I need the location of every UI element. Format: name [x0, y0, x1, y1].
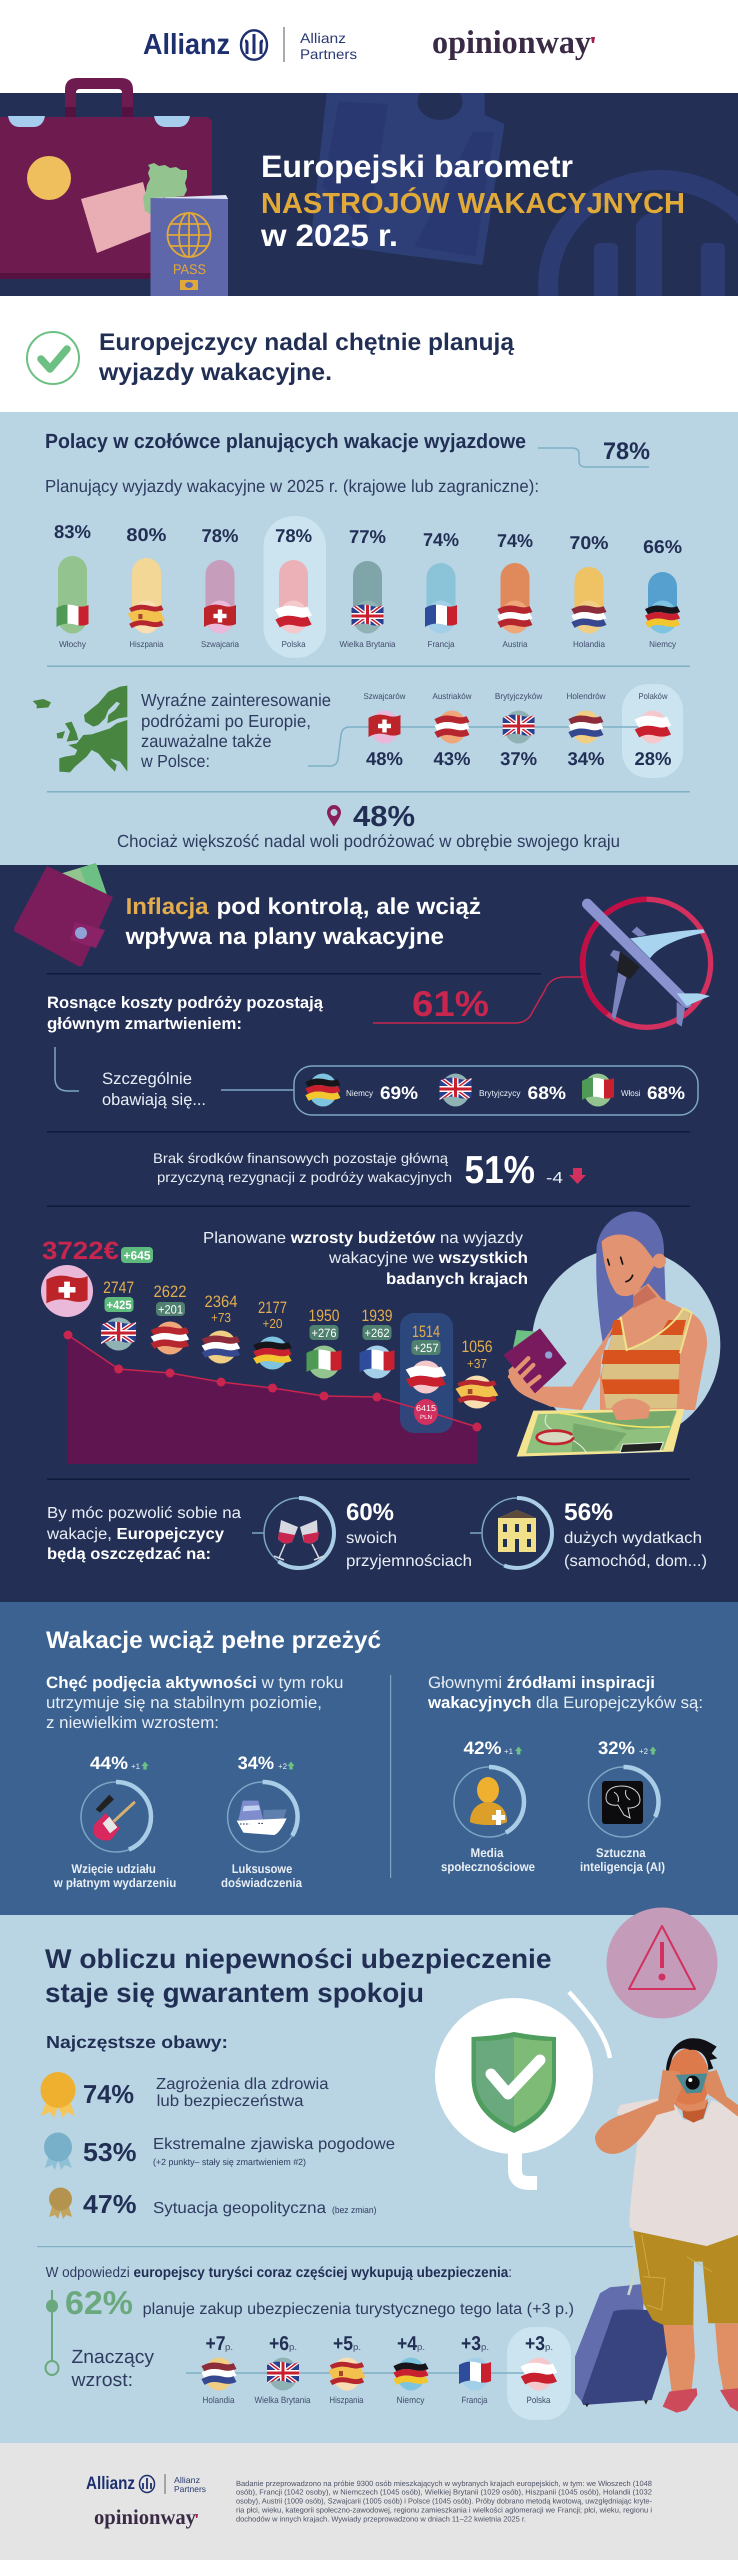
bar: Francja 74%: 74% [423, 529, 459, 550]
bar: Niemcy 66%: 66% [643, 536, 682, 557]
timeline marker [46, 2290, 58, 2375]
illustration: woman with wallet and map [503, 1212, 720, 1457]
bar: Wielka Brytania 77%: Wielka Brytania [340, 639, 396, 649]
heading: inflation: Inflacja [126, 893, 209, 919]
item: Hiszpania +5: +5 [333, 2333, 353, 2355]
item: 47% geopolitical situation [49, 2188, 376, 2219]
bar: Włochy 83% [54, 521, 91, 649]
bar: Szwajcaria 78%: 78% [202, 525, 238, 546]
logo: Allianz [143, 27, 357, 62]
stat: 42% social media: +1 [504, 1747, 514, 1756]
item: Polska 1514: +257 [414, 1341, 439, 1355]
item: Szwajcaria 3722 €: +645 [124, 1248, 151, 1262]
item: Polska +3: p. [545, 2342, 553, 2352]
bar: Wielka Brytania 77% [340, 526, 396, 649]
item: Wielka Brytania +6 [254, 2333, 310, 2405]
text: methodology note [236, 2479, 652, 2524]
heading with 78% callout: 78% [603, 438, 650, 465]
stat: 44% paid event: +1 [131, 1762, 141, 1771]
chart: planned holiday budgets [41, 1237, 495, 1464]
stat: 34% luxury: 34% [238, 1753, 274, 1773]
title: w 2025 r. [260, 218, 398, 253]
stat: 56% big expenses: dużych wydatkach [564, 1530, 702, 1547]
item: Hiszpania +5: p. [353, 2342, 361, 2352]
item: 74% health threats [40, 2072, 329, 2118]
logo: Allianz Partners [86, 2473, 206, 2494]
stat: 62% plan to buy insurance: 62% [65, 2284, 133, 2321]
logo: opinionway: opinionway [94, 2505, 196, 2529]
item: Polaków 28%: Polaków [638, 691, 668, 701]
panel: footer [0, 2443, 738, 2560]
stat: 32% artificial intelligence: inteligencja (AI) [580, 1860, 665, 1874]
stat: 34% luxury: Luksusowe [232, 1862, 292, 1876]
item: Wielka Brytania 2747: 2747 [103, 1279, 134, 1297]
bar: Austria 74%: 74% [497, 530, 533, 551]
chart: pill bars by country [54, 521, 682, 649]
bar: Austria 74%: Austria [502, 639, 528, 649]
item: Francja 1939: 1939 [362, 1307, 392, 1325]
bar: Hiszpania 80%: Hiszpania [129, 639, 164, 649]
text: activities: Chęć podjęcia aktywności w tym roku [46, 1674, 344, 1692]
heading: inflation: wpływa na plany wakacyjne [125, 923, 444, 949]
heading: inflation [125, 893, 481, 949]
logo: Allianz Partners: Partners [174, 2484, 206, 2494]
stat: 51% lack of funds: 51% [464, 1149, 535, 1192]
item: Szwajcaria 3722 €: 3722€ [42, 1237, 119, 1265]
stat: 60% pleasures [252, 1498, 472, 1570]
item: Polaków 28% [634, 691, 672, 769]
item: Wielka Brytania +6: +6 [269, 2333, 289, 2355]
item: 47% geopolitical situation: (bez zmian) [332, 2205, 376, 2215]
item: Szwajcarów 48%: Szwajcarów [364, 691, 406, 701]
text: particularly worried: Szczególnie [102, 1070, 192, 1088]
item: 53% extreme weather: Ekstremalne zjawiska pogodowe [153, 2136, 395, 2153]
item: Francja +3: Francja [462, 2395, 488, 2405]
icon: wine glasses [274, 1520, 324, 1560]
icon: person with plus [470, 1777, 507, 1825]
item: Hiszpania 1056: 1056 [462, 1338, 492, 1356]
item: Austriaków 43%: 43% [434, 748, 470, 769]
header logos [0, 0, 738, 93]
text: significant increase: Znaczący [72, 2347, 155, 2368]
text: methodology note: Badanie przeprowadzono na próbie 9300 osób mieszkających w wybranych krajach europejskich, w tym: we Włoszech (1048 [236, 2479, 652, 2488]
item: Niemcy +4 [395, 2333, 427, 2405]
bar: Polska 78%: Polska [282, 639, 306, 649]
text: methodology note: osób), Francji (1042 osoby), w Niemczech (1045 osób), Wielkiej Brytanii (1029 osób), Hiszpanii (1045 osób), Holandii (1032 [236, 2488, 652, 2496]
stat: 32% artificial intelligence [580, 1738, 665, 1874]
item: Francja +3: +3 [461, 2333, 481, 2355]
text: what Europeans will save on: będą oszczędzać na: [47, 1546, 211, 1563]
stat: 48% domestic travel: Chociaż większość nadal woli podróżować w obrębie swojego kraju [117, 831, 620, 851]
stat: 61% rising costs: Rosnące koszty podróży pozostają [47, 994, 324, 1012]
stat: 51% lack of funds: Brak środków finansowych pozostaje główną [153, 1150, 448, 1166]
text: significant increase [70, 2347, 155, 2391]
logo: Allianz Partners: Allianz [86, 2473, 135, 2493]
item: Niemcy 2177 [255, 1299, 290, 1370]
text: activities [46, 1674, 344, 1732]
bar: Holandia 70%: 70% [570, 532, 608, 553]
item: Polska +3 [523, 2333, 555, 2405]
item: Holandia +7: Holandia [202, 2395, 234, 2405]
item: 47% geopolitical situation: Sytuacja geopolityczna [153, 2200, 326, 2217]
stat: 60% pleasures: swoich [346, 1530, 397, 1547]
stat: 42% social media: 42% [464, 1738, 502, 1758]
text: methodology note: dochodów w innych krajach. Wywiady przeprowadzono w dniach 11–22 kwietnia 2025 r. [236, 2514, 526, 2524]
item: Brytyjczyków 37%: Brytyjczyków [495, 691, 543, 701]
connector: to 61% [373, 977, 583, 1023]
text: insurance purchase: W odpowiedzi europejscy turyści coraz częściej wykupują ubezpieczenia: [46, 2265, 512, 2281]
highlight: Poland column [400, 1313, 453, 1433]
item: 53% extreme weather: 53% [83, 2137, 136, 2167]
icon: map of Europe [33, 686, 127, 772]
title: Europejski barometr [261, 149, 573, 184]
text: interest in Europe: Wyraźne zainteresowanie [141, 690, 331, 710]
icon: AI brain [602, 1781, 643, 1824]
item: Brytyjczyków 37% [495, 691, 543, 769]
text: activities: utrzymuje się na stabilnym poziomie, [46, 1694, 322, 1712]
text: what Europeans will save on: wakacje, Europejczycy [46, 1526, 224, 1543]
item: Polska +3: Polska [526, 2395, 550, 2405]
item: Polska +3: +3 [525, 2333, 545, 2355]
item: Holandia +7: p. [225, 2342, 233, 2352]
intro heading: wyjazdy wakacyjne. [98, 359, 332, 386]
text: particularly worried [102, 1070, 206, 1109]
text: particularly worried: obawiają się... [102, 1091, 206, 1109]
stat: 34% luxury [221, 1753, 303, 1890]
bar: Niemcy 66%: Niemcy [649, 639, 677, 649]
item: Niemcy 2177: +20 [262, 1316, 282, 1331]
icon: location pin [327, 805, 341, 826]
item: 74% health threats: 74% [83, 2079, 134, 2109]
item: Francja +3 [459, 2333, 491, 2405]
item: Szwajcarów 48% [364, 691, 406, 769]
bar: Hiszpania 80%: 80% [126, 524, 166, 545]
stat: 60% pleasures: 60% [346, 1499, 394, 1526]
item: Hiszpania +5: Hiszpania [330, 2395, 364, 2405]
panel: Poles among leaders [0, 412, 738, 865]
background watermark: map, pin and logo [310, 93, 738, 296]
item: Szwajcaria 3722 € [41, 1237, 153, 1317]
callout: most worried countries: 68% [647, 1083, 685, 1103]
text: what Europeans will save on [46, 1505, 241, 1563]
line and markers [64, 1330, 482, 1432]
area under line [68, 1335, 477, 1464]
item: Holandia 2364: 2364 [204, 1293, 238, 1311]
item: Polaków 28%: 28% [634, 748, 672, 769]
item: Szwajcarów 48%: 48% [366, 748, 403, 769]
text: inspiration sources [427, 1674, 703, 1712]
icon: crossed-out plane [582, 899, 711, 1027]
bar: Polska 78%: 78% [275, 525, 312, 546]
item: Wielka Brytania 2747: +425 [106, 1298, 132, 1312]
text: activities: z niewielkim wzrostem: [46, 1714, 219, 1732]
stat: 44% paid event: Wzięcie udziału [71, 1862, 156, 1876]
text: inspiration sources: wakacyjnych dla Europejczyków są: [427, 1694, 703, 1712]
icon: shield in white bubble [435, 1992, 610, 2183]
stat: 60% pleasures: przyjemnościach [346, 1553, 472, 1570]
item: Austria 2622 [152, 1283, 188, 1354]
text: inspiration sources: Głownymi źródłami inspiracji [428, 1674, 655, 1692]
panel: intro statement [0, 296, 738, 412]
subheading: Najczęstsze obawy: [46, 2032, 228, 2052]
stat: 51% lack of funds: przyczyną rezygnacji z podróży wakacyjnych [157, 1169, 452, 1185]
bar: Holandia 70%: Holandia [573, 639, 605, 649]
heading: staje się gwarantem spokoju [45, 1978, 424, 2008]
panel: hero banner [0, 78, 738, 296]
item: Włochy 1950 [306, 1307, 342, 1378]
stat: 44% paid event: w płatnym wydarzeniu [53, 1876, 176, 1890]
icon: yacht [237, 1801, 287, 1835]
illustration: suitcase with passport: PASS [173, 261, 206, 277]
intro heading: Europejczycy nadal chętnie planują [99, 329, 515, 356]
item: Holendrów 34% [566, 691, 606, 769]
item: Polska 1514: 1514 [412, 1323, 440, 1341]
item: Austriaków 43%: Austriaków [432, 691, 472, 701]
icon: house [498, 1510, 536, 1552]
item: Wielka Brytania +6: Wielka Brytania [254, 2395, 310, 2405]
text: methodology note: ria płci, wieku, kategorii społeczno-zawodowej, regionu zamieszkania i wielkości aglomeracji we Francji; płci, wieku, regionu i [236, 2506, 652, 2514]
item: Wielka Brytania 2747 [101, 1279, 136, 1350]
callout: most worried countries: Niemcy [346, 1088, 374, 1098]
item: Austria 2622: +201 [158, 1302, 183, 1316]
title: NASTROJÓW WAKACYJNYCH [261, 187, 685, 220]
text: what Europeans will save on: By móc pozwolić sobie na [47, 1505, 241, 1522]
stat: 56% big expenses: (samochód, dom...) [564, 1553, 707, 1570]
item: Brytyjczyków 37%: 37% [500, 748, 537, 769]
item: Holandia +7: +7 [206, 2333, 226, 2355]
stat: 34% luxury: doświadczenia [221, 1876, 303, 1890]
panel: holidays full of experiences [0, 1602, 738, 1915]
item: Hiszpania +5 [330, 2333, 364, 2405]
stat: 44% paid event: 44% [90, 1753, 128, 1773]
stat: 61% rising costs: głównym zmartwieniem: [47, 1015, 242, 1033]
item: Niemcy +4: +4 [397, 2333, 418, 2355]
item: Wielka Brytania +6: p. [289, 2342, 297, 2352]
heading: Wakacje wciąż pełne przeżyć [46, 1627, 381, 1654]
stat: 32% artificial intelligence: +2 [639, 1747, 649, 1756]
stat: 51% lack of funds [153, 1149, 586, 1192]
stat: 42% social media [441, 1738, 535, 1874]
text: budget increases: Planowane wzrosty budżetów na wyjazdy [203, 1230, 523, 1247]
item: Niemcy +4: p. [417, 2342, 425, 2352]
bar: Holandia 70% [570, 532, 608, 649]
text: interest in Europe [140, 690, 331, 771]
stat: 62% plan to buy insurance: planuje zakup ubezpieczenia turystycznego tego lata (+3 p.) [143, 2301, 574, 2318]
item: Polska 1514: PLN [420, 1414, 432, 1421]
item: Hiszpania 1056: +37 [467, 1356, 487, 1371]
logo: Allianz Partners: Allianz [174, 2475, 200, 2485]
heading: W obliczu niepewności ubezpieczenie [45, 1944, 552, 1974]
bar: Włochy 83%: 83% [54, 521, 91, 542]
stat: 51% lack of funds: -4 [546, 1170, 563, 1187]
illustration: man with camera and suitcase [575, 2038, 738, 2413]
item: 74% health threats: Zagrożenia dla zdrowia [156, 2076, 329, 2093]
text: interest in Europe: podróżami po Europie, [141, 711, 311, 731]
heading with 78% callout [45, 430, 650, 467]
text: interest in Europe: zauważalne także [141, 731, 272, 751]
highlight: Polska [507, 2327, 571, 2420]
bar: Francja 74%: Francja [428, 639, 455, 649]
chart: increase by country [202, 2333, 555, 2405]
bar: Szwajcaria 78% [201, 525, 239, 649]
panel: insurance [0, 1908, 738, 2443]
callout: most worried countries: Włosi [621, 1088, 641, 1098]
item: Hiszpania 1056 [459, 1338, 495, 1408]
bar: Hiszpania 80% [126, 524, 166, 649]
item: 53% extreme weather [44, 2132, 395, 2170]
heading with 78% callout: Polacy w czołówce planujących wakacje wyjazdowe [45, 430, 526, 453]
item: 74% health threats: lub bezpieczeństwa [157, 2093, 304, 2110]
icon: wallet [14, 863, 113, 966]
bar: Austria 74% [497, 530, 533, 649]
icon: warning sign [606, 1908, 718, 2018]
item: Włochy 1950: +276 [312, 1326, 337, 1340]
logo: Allianz: Partners [300, 46, 357, 62]
bar: Włochy 83%: Włochy [59, 639, 87, 649]
stat: 42% social media: Media [470, 1846, 504, 1860]
heading: inflation: pod kontrolą, ale wciąż [216, 893, 481, 919]
item: Austria 2622: 2622 [154, 1283, 186, 1301]
panel: inflation [0, 863, 738, 1602]
item: Holandia 2364: +73 [211, 1310, 231, 1325]
stat: 48% domestic travel: 48% [353, 801, 415, 833]
stat: 62% plan to buy insurance [65, 2284, 574, 2321]
stat: 42% social media: społecznościowe [441, 1860, 535, 1874]
stat: 34% luxury: +2 [278, 1762, 288, 1771]
text: significant increase: wzrost: [70, 2370, 133, 2391]
item: Francja 1939: +262 [364, 1326, 390, 1340]
item: Polska 1514 [408, 1323, 444, 1425]
stat: 56% big expenses [470, 1498, 707, 1570]
item: Holandia 2364 [203, 1293, 239, 1364]
item: Włochy 1950: 1950 [308, 1307, 340, 1325]
item: 53% extreme weather: (+2 punkty– stały się zmartwieniem #2) [153, 2157, 306, 2167]
item: Austriaków 43% [432, 691, 472, 769]
text: budget increases [203, 1230, 528, 1288]
bar: Wielka Brytania 77%: 77% [349, 526, 386, 547]
item: 47% geopolitical situation: 47% [83, 2189, 136, 2219]
logo: Allianz: Allianz [300, 30, 346, 46]
item: Holendrów 34%: Holendrów [566, 691, 606, 701]
icon: check mark [27, 332, 79, 384]
bar: Polska 78% [275, 525, 312, 649]
item: Francja 1939 [359, 1307, 395, 1378]
callout: most worried countries: 69% [380, 1083, 418, 1103]
stat: 48% domestic travel [117, 801, 620, 851]
item: Polska 1514: 6415 [416, 1403, 436, 1413]
item: Niemcy +4: Niemcy [396, 2395, 425, 2405]
stat: 56% big expenses: 56% [564, 1499, 613, 1526]
stat: 32% artificial intelligence: Sztuczna [596, 1846, 647, 1860]
callout: most worried countries [294, 1066, 698, 1115]
highlight: Polska [264, 516, 326, 658]
callout: most worried countries: 68% [528, 1083, 566, 1103]
intro heading [98, 329, 515, 386]
stat: 32% artificial intelligence: 32% [598, 1738, 635, 1758]
highlight: Polaków [622, 684, 683, 778]
logo: opinionway: opinionway [432, 25, 591, 61]
stat: 61% rising costs: 61% [412, 983, 489, 1024]
logo: Allianz: Allianz [143, 29, 230, 61]
item: Holendrów 34%: 34% [568, 748, 604, 769]
icon: guitar and microphone [93, 1795, 134, 1841]
text: budget increases: wakacyjne we wszystkich [328, 1250, 528, 1267]
text: interest in Europe: w Polsce: [140, 751, 210, 771]
stat: 61% rising costs [47, 983, 489, 1033]
chart: travel across Europe by nationality [364, 691, 672, 769]
illustration: suitcase with passport [0, 78, 228, 304]
bar: Niemcy 66% [643, 536, 682, 649]
title [260, 149, 685, 253]
text: methodology note: osoby), Austrii (1009 osób), Szwajcarii (1005 osób) i Polsce (1045 osób). Próby dobrano metodą kwotową, uwzględniając kryte- [236, 2496, 652, 2506]
text: budget increases: badanych krajach [386, 1271, 528, 1288]
item: Niemcy 2177: 2177 [258, 1299, 287, 1317]
bar: Szwajcaria 78%: Szwajcaria [201, 639, 239, 649]
item: Holandia +7 [202, 2333, 235, 2405]
subtitle: Planujący wyjazdy wakacyjne w 2025 r. (krajowe lub zagraniczne): [45, 476, 539, 496]
heading [45, 1944, 552, 2008]
stat: 44% paid event [53, 1753, 176, 1890]
bar: Francja 74% [423, 529, 459, 649]
item: Francja +3: p. [481, 2342, 489, 2352]
callout: most worried countries: Brytyjczycy [479, 1088, 521, 1098]
